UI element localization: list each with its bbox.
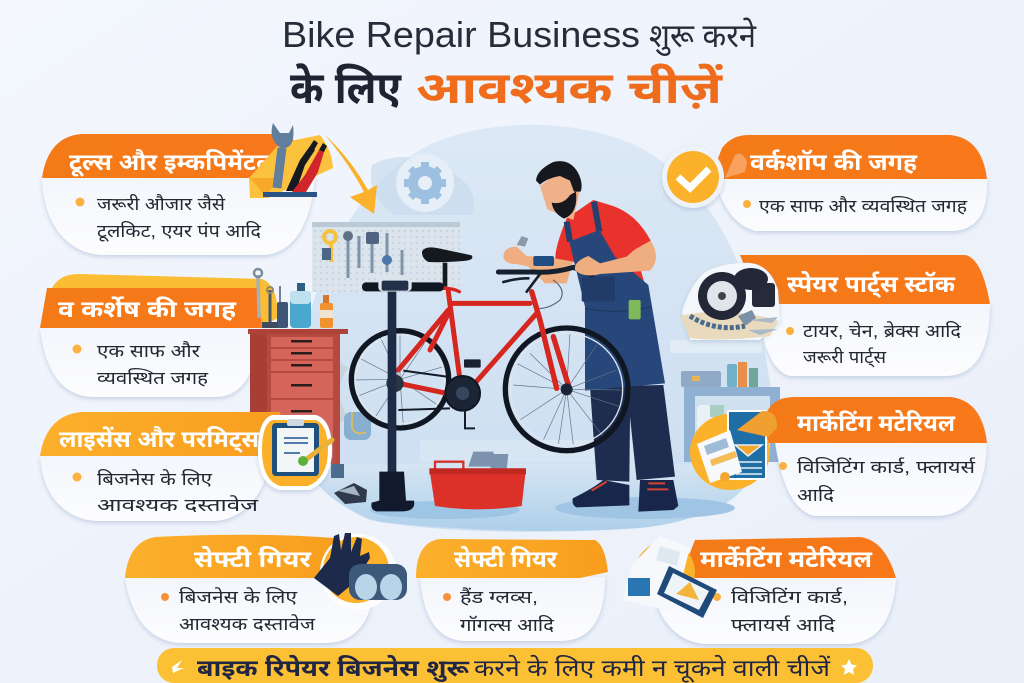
bicycle in repair stand: [351, 241, 656, 511]
bullet text: [161, 586, 316, 634]
bullet text: विजिटिंग कार्ड,: [731, 587, 848, 607]
icon: marketing flyer: [623, 536, 717, 618]
panel: business location: [40, 274, 278, 397]
bullet text: [443, 587, 555, 635]
bullet text: आदि: [797, 485, 835, 505]
bullet text: फ्लायर्स आदि: [731, 615, 836, 635]
saddle: [422, 247, 472, 287]
bullet text: [76, 193, 262, 243]
rear wheel: [351, 331, 449, 428]
panel: marketing material 2: [650, 537, 896, 644]
right arm over handlebar: [575, 241, 656, 275]
bullet text: [779, 457, 976, 505]
boots: [572, 480, 678, 512]
legs: [590, 385, 675, 482]
bullet text: विजिटिंग कार्ड, फ्लायर्स: [797, 457, 976, 477]
chainset: [386, 359, 573, 428]
bullet text: व्यवस्थित जगह: [97, 368, 209, 388]
bullet text: [713, 587, 848, 635]
panel: marketing material: [755, 397, 987, 516]
shirt: [555, 200, 651, 285]
banner text: [197, 655, 831, 683]
panel: safety gear: [125, 535, 375, 643]
icon: check badge: [662, 146, 724, 208]
panel: tools and equipment: [42, 134, 315, 255]
front wheel: [505, 328, 628, 451]
pegboard with tools: [312, 222, 460, 292]
title: [282, 14, 757, 113]
central illustration backdrop: [300, 125, 772, 532]
bullet text: बिजनेस के लिए: [97, 468, 212, 489]
bullet text: जरूरी औजार जैसे: [97, 193, 226, 214]
icon: marketing documents: [690, 410, 777, 490]
red toolbox: [429, 452, 526, 509]
pliers on floor: [334, 483, 367, 504]
heading: टूल्स और इम्कपिमेंटल: [69, 149, 275, 177]
heading: मार्केटिंग मटेरियल: [700, 546, 873, 572]
bullet text: गॉगल्स आदि: [460, 615, 555, 635]
bullet text: आवश्यक दस्तावेज: [97, 494, 259, 515]
heading: सेफ्टी गियर: [194, 546, 312, 572]
heading: सेफ्टी गियर: [454, 546, 558, 572]
tool cabinet with bottles: [248, 269, 348, 478]
decorative gear icon: [396, 154, 454, 212]
bullet text: टायर, चेन, ब्रेक्स आदि: [803, 320, 962, 341]
icon: tyres and chain: [680, 263, 780, 340]
panel: spare parts stock: [740, 255, 990, 376]
repair stand: [362, 277, 444, 511]
icon: clipboard: [258, 415, 332, 490]
banner text: करने के लिए कमी न चूकने वाली चीजें: [474, 655, 831, 683]
icon: star: [841, 659, 857, 675]
bullet text: हैंड ग्लव्स,: [460, 587, 538, 607]
title: आवश्यक चीज़ें: [416, 63, 724, 113]
frame: [398, 288, 568, 393]
bullet text: जरूरी पार्ट्स: [803, 347, 887, 368]
bullet text: टूलकिट, एयर पंप आदि: [97, 221, 262, 243]
bottom banner: [157, 648, 873, 683]
panel: licence and permits: [40, 412, 290, 521]
banner text: बाइक रिपेयर बिजनेस शुरू: [197, 655, 470, 682]
bullet text: [786, 320, 962, 368]
bullet text: [72, 341, 209, 388]
bullet text: आवश्यक दस्तावेज: [179, 613, 316, 634]
panel: workshop space: [710, 135, 987, 231]
bullet text: एक साफ और: [97, 341, 201, 361]
arrow: [325, 135, 377, 214]
icon: sparkle: [172, 660, 184, 673]
title: शुरू करने: [649, 16, 757, 56]
head: [536, 161, 582, 220]
apron: [567, 202, 665, 391]
bullet text: [72, 468, 259, 515]
handlebar: [498, 256, 592, 308]
heading: लाइसेंस और परमिट्स: [59, 426, 260, 453]
title: के लिए: [290, 62, 402, 113]
heading: मार्केटिंग मटेरियल: [797, 410, 956, 436]
icon: gloves and goggles: [314, 533, 407, 610]
heading: स्पेयर पार्ट्स स्टॉक: [787, 271, 956, 298]
wall hook and background wheel: [335, 365, 371, 440]
bullet text: एक साफ और व्यवस्थित जगह: [759, 196, 968, 216]
mechanic: [503, 161, 678, 512]
bullet text: बिजनेस के लिए: [179, 586, 297, 607]
panel: safety gear 2: [416, 539, 608, 641]
heading: व कर्शेष की जगह: [58, 296, 237, 322]
left arm holding tool: [503, 236, 573, 283]
title: Bike Repair Business: [282, 14, 640, 55]
icon: tools: [249, 123, 333, 198]
parts shelf right: [681, 362, 780, 462]
heading: वर्कशॉप की जगह: [750, 149, 918, 175]
